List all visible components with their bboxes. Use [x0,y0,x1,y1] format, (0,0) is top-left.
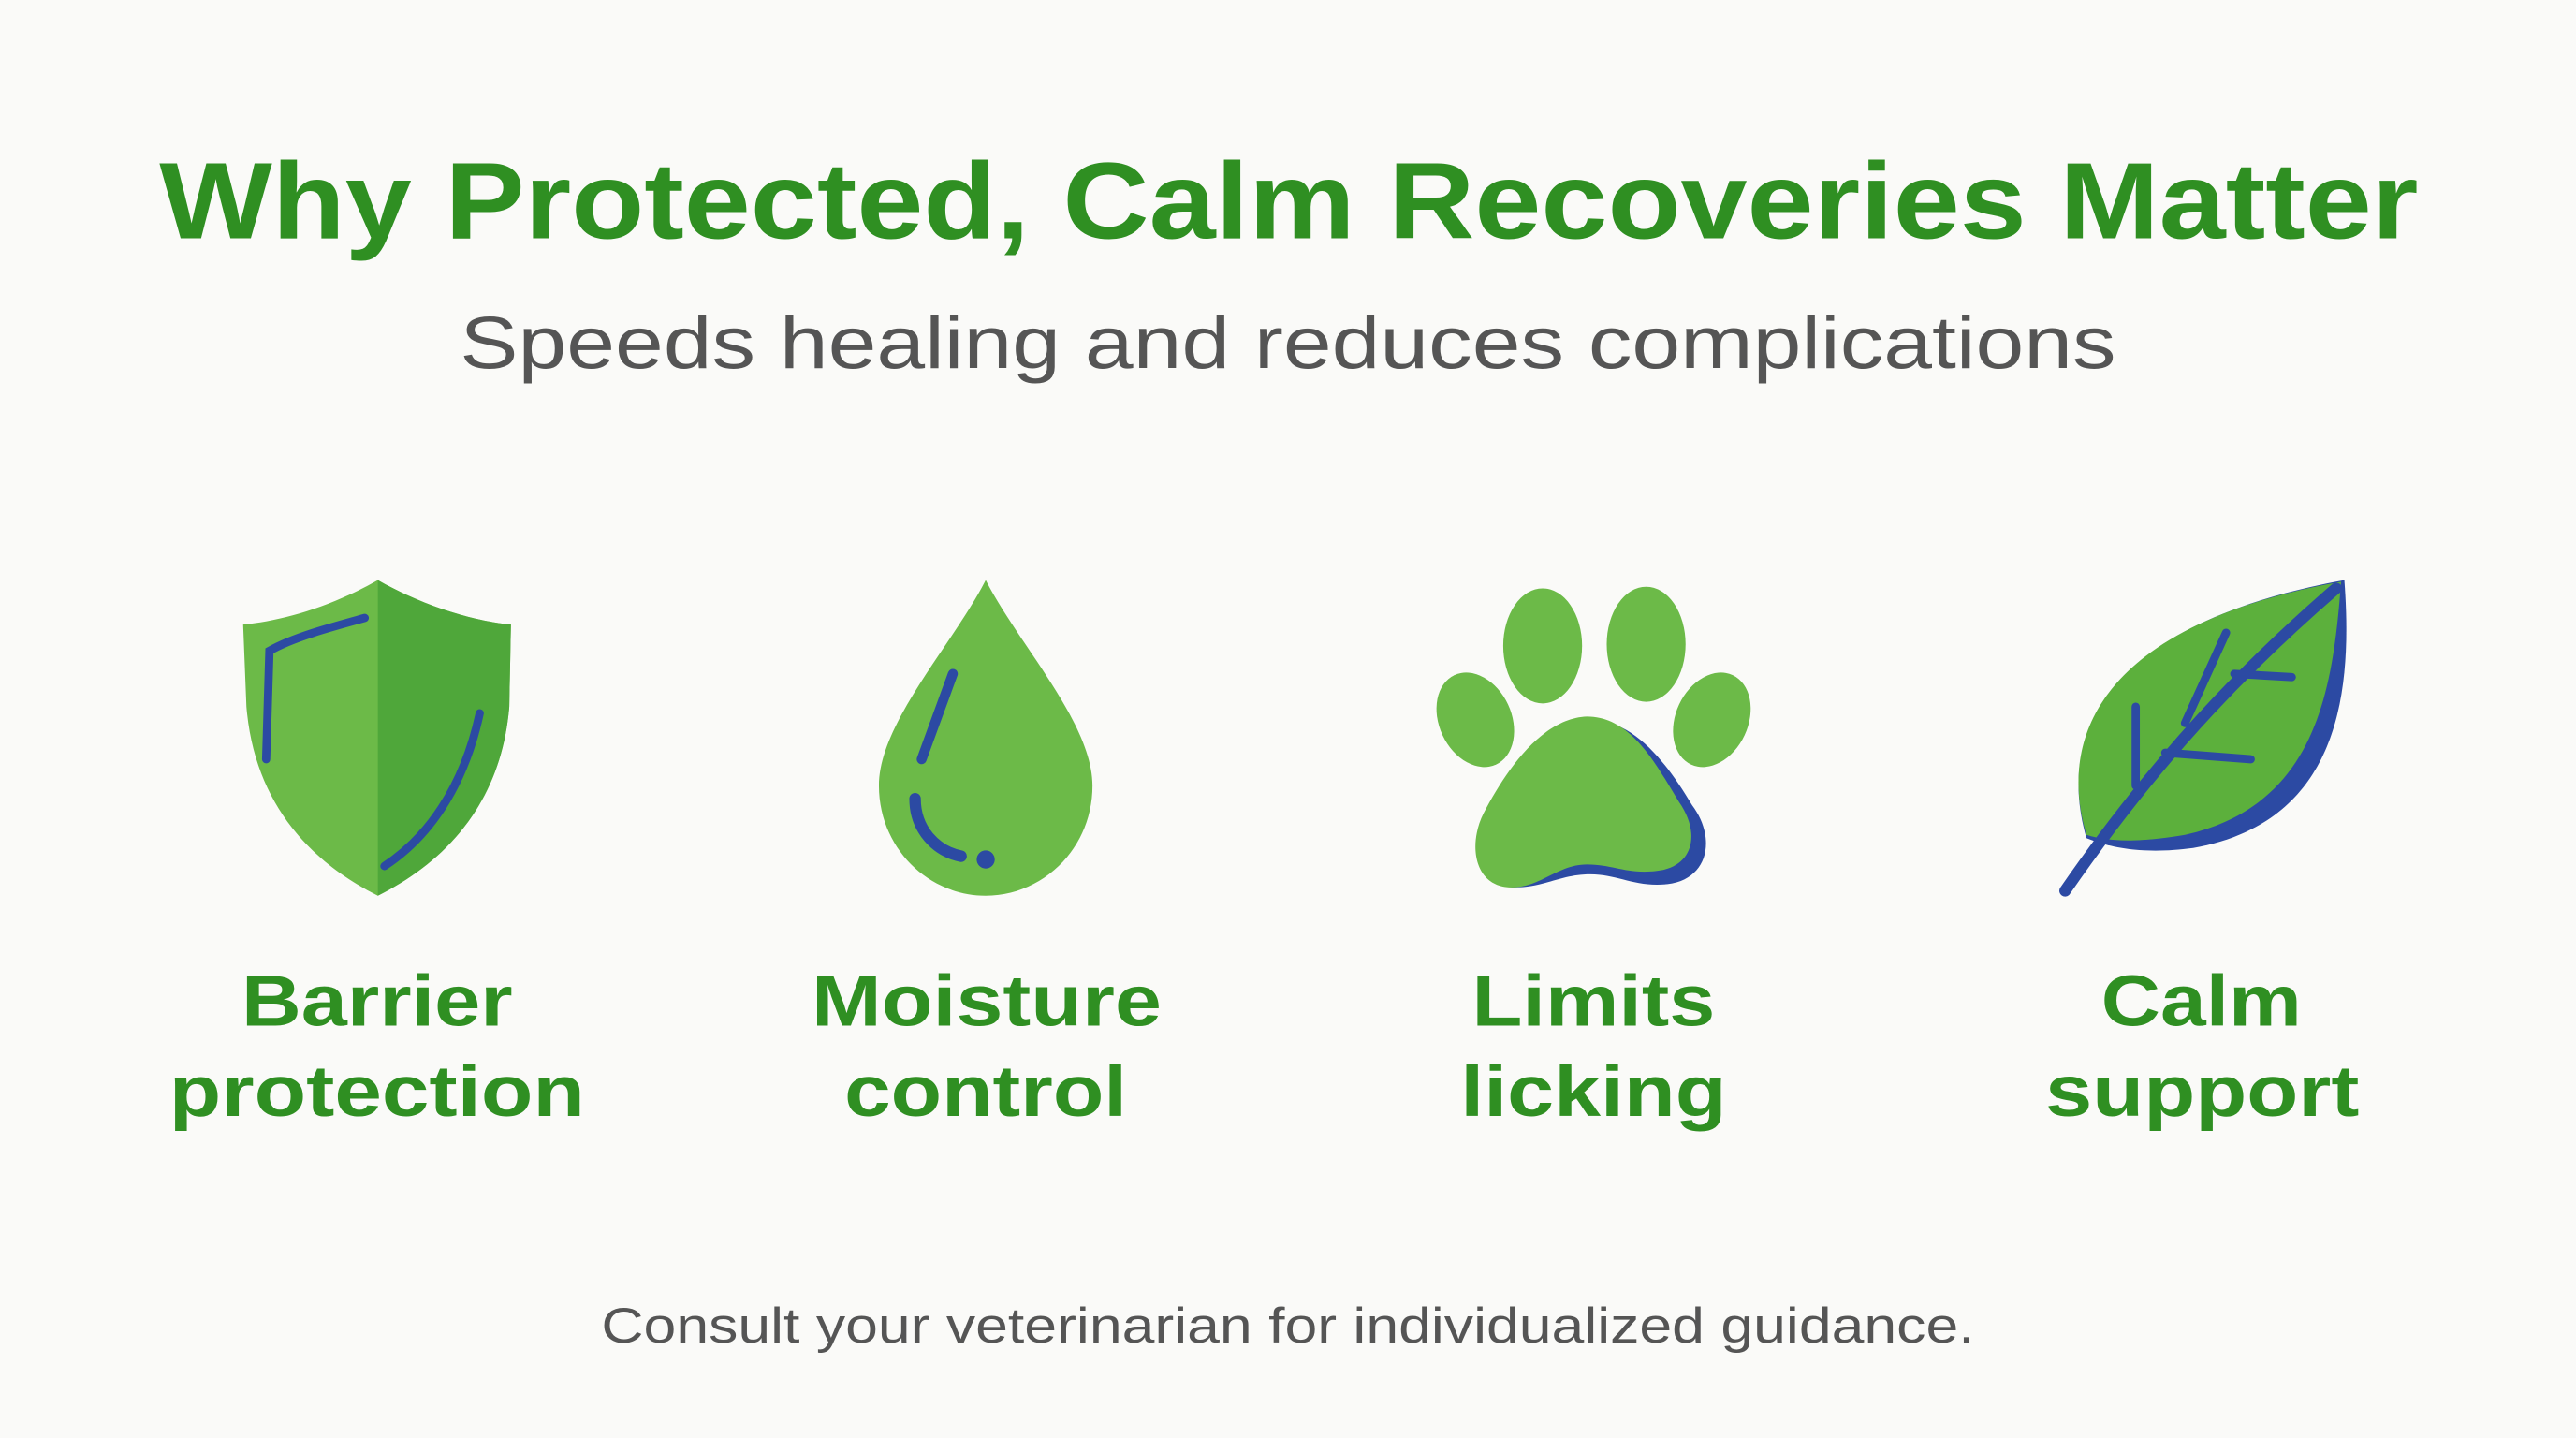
label: barrier protection [169,961,585,1132]
label: calm support: Calm [2101,961,2302,1041]
footer note: Consult your veterinarian for individualized guidance. [601,1299,1975,1354]
label: barrier protection: protection [169,1051,585,1132]
label: limits licking: Limits [1472,961,1715,1041]
label: moisture control [812,961,1162,1132]
subtitle: Speeds healing and reduces complications [460,301,2116,384]
label: limits licking [1460,961,1727,1132]
icon: paw [1422,587,1765,888]
title: Why Protected, Calm Recoveries Matter [159,140,2419,262]
label: moisture control: Moisture [812,961,1162,1041]
label: limits licking: licking [1460,1051,1727,1132]
icon: shield [243,580,511,896]
label: moisture control: control [844,1051,1127,1132]
label: barrier protection: Barrier [242,961,513,1041]
label: calm support [2045,961,2359,1132]
icon: water drop [879,580,1092,896]
label: calm support: support [2045,1051,2359,1132]
icon: leaf [2065,580,2347,890]
